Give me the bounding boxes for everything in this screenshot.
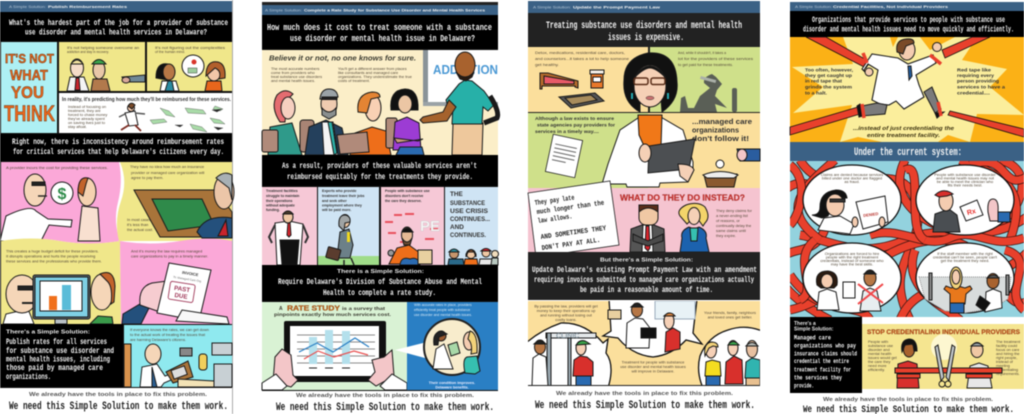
panel: it's not what you think: IT'S NOT — [5, 51, 54, 66]
panel: not the complexities — [147, 42, 232, 91]
panel: in reality: Instead of focusing on — [68, 104, 106, 109]
footer: We already have the tools in place to fix this problem. — [29, 392, 208, 398]
icon: clinic doors and two men: CLINIC — [556, 333, 579, 340]
panel: stop credentialing: facility could — [996, 343, 1017, 348]
panel: classroom scene — [262, 50, 498, 155]
panel: in reality: on saving lives just to — [68, 120, 105, 125]
panel: classroom scene: and mental health issues. — [271, 78, 315, 83]
panel: detox and medications: and counselors...it takes a lot to help someone — [535, 56, 629, 61]
panel: provider incurs cost — [0, 162, 232, 324]
panel: solution: those paid by managed care — [6, 364, 103, 373]
panel: what do they do instead: they expire. — [716, 233, 736, 238]
panel: treating issues: are harming Delaware's citizens. — [130, 337, 186, 342]
panel: past due: And it's money the law requires managed — [131, 248, 202, 254]
top title bar: Publish Reimbursement Rates — [48, 4, 128, 9]
panel: red tape starburst: credential.... — [957, 90, 990, 96]
panel: it's not what you think: THINK — [4, 101, 55, 126]
panel: benefits scene: use disorder and mental health issues — [620, 364, 686, 369]
note: they pay late — [528, 181, 619, 257]
icon: woman walking with briefcase — [326, 214, 354, 265]
whiteboard — [423, 50, 498, 106]
panel: in reality: stay afloat. — [68, 124, 87, 129]
panel: credential facilities — [777, 2, 1024, 414]
panel: managed care don't follow: ...managed care — [692, 119, 752, 126]
panel: red tape starburst: requiring every — [957, 73, 995, 78]
banner: solution: There is a Simple Solution: — [337, 269, 424, 275]
panel: what do they do instead: same claims until — [716, 228, 746, 233]
note: they pay late: They pay late — [534, 194, 575, 208]
panel: stop credentialing: substance use — [868, 343, 893, 348]
panel: classroom scene: treat substance use disorders — [271, 74, 322, 79]
footer — [803, 397, 1014, 414]
icon: flying money — [150, 106, 225, 132]
panel: treatment facilities: Treatment facilities — [266, 189, 298, 193]
panel: red tape starburst: they get caught up — [805, 73, 852, 78]
panel: people with disorders: the care they deserve. — [385, 199, 422, 203]
icon: doctor and patient in circle — [424, 319, 480, 375]
panel: solution: for substance use disorder and — [6, 347, 114, 356]
bubble: people with disorders: and mental health issues may not — [936, 176, 995, 180]
panel: past due — [120, 238, 232, 324]
panel: stop credentialing: People with — [868, 339, 888, 344]
top title bar — [0, 1, 232, 12]
icon: hand tossing paper in trash — [703, 149, 760, 187]
top title bar — [262, 2, 498, 15]
panel: providers get paid: And, while it shouldn't, it takes a — [678, 50, 727, 55]
bubble: staff member: credential can't be seen, people can't — [933, 254, 998, 260]
banner: inconsistency: for critical services that help Delaware's citizens every day. — [13, 147, 224, 157]
footer — [262, 391, 498, 414]
bubble: staff member: get the treatment they need. — [941, 258, 989, 263]
panel: crisis continues: USE CRISIS — [450, 208, 489, 215]
panel: crisis continues: SUBSTANCE — [450, 200, 486, 207]
panel: experts: employment where they — [322, 204, 362, 208]
banner: solution: Require Delaware's Division of Substance Abuse and Mental — [278, 277, 482, 287]
icon: invoice and hand: INVOICE — [182, 270, 199, 277]
panel: solution: insurance claims should — [794, 350, 857, 358]
bubble: people with disorders: People with substance use disorder — [934, 172, 996, 177]
top title bar: A Simple Solution: — [533, 6, 571, 10]
panel: solution: treatment facility for — [794, 366, 851, 374]
icon: running doctor — [119, 103, 145, 131]
panel: although a law exists: services in a timely way.... — [535, 129, 599, 134]
panel: detox and medications: Detox, medications, residential care, doctors, — [535, 50, 625, 55]
panel: providers get paid: lot for the providers of these services — [678, 56, 753, 61]
panel: people with disorders: disorders don't receive — [385, 194, 423, 198]
bubble: claims denied: billed under one doctor are flagged — [822, 176, 882, 180]
icon: doctor with denied paper: DENIED — [863, 211, 879, 218]
panel: red tape starburst: entire treatment facility. — [867, 133, 940, 139]
panel: red tape starburst: person providing — [957, 78, 999, 84]
panel: it's not what you think: WHAT — [10, 67, 48, 84]
bubble: organizations forced: people with the right treatment — [826, 254, 879, 260]
bubble: claims denied: as fraud. — [844, 179, 860, 184]
heading: hardest part — [0, 12, 232, 41]
bubble: staff member — [916, 243, 1014, 313]
icon: doctor with clipboard and patient — [608, 301, 695, 352]
footer: We already have the tools in place to fix this problem. — [556, 391, 734, 397]
footer: We need this Simple Solution to make them work. — [9, 401, 228, 413]
top title bar: Complete a Rate Study for Substance Use Disorder and Mental Health Services — [304, 8, 486, 12]
panel: red tape starburst — [790, 37, 1024, 142]
icon: friends and family — [705, 340, 760, 386]
panel: stop credentialing: the care they — [868, 359, 891, 364]
panel: benefits scene: money to keep their operations up — [537, 308, 595, 313]
panel: benefits scene: Your friends, family, neighbors — [704, 310, 756, 315]
panel: stop credentialing: need more — [868, 363, 887, 368]
panel: condition improves: Their condition improves. — [429, 381, 475, 385]
panel: classroom scene: Believe it or not, no one knows for sure. — [269, 54, 416, 62]
icon: chain-link fence and people — [919, 267, 1011, 313]
panel: treating issues: If everyone knows the rates, we can get down — [130, 327, 209, 332]
panel: crisis continues: AND — [450, 224, 464, 231]
banner: result: reimbursed equitably for the treatments they provide. — [287, 172, 473, 182]
panel: in reality: In reality, it's predicting how much they'll be reimbursed for these services. — [62, 97, 232, 103]
panel: rate study chart — [262, 302, 407, 390]
panel: condition improves — [395, 302, 498, 390]
panel: experts: and seek other — [322, 199, 347, 203]
footer: We already have the tools in place to fix this problem. — [296, 393, 475, 399]
panel: in reality: they've already spent — [68, 116, 106, 121]
panel: no idea how much: the actual cost. — [127, 227, 153, 232]
panel: no idea how much: They have no idea how much an insurance — [130, 164, 204, 169]
heading: under the current system: Under the current system: — [854, 147, 962, 159]
heading: treating is expensive: Treating substance use disorders and mental health — [546, 20, 742, 32]
top title bar: Update the Prompt Payment Law — [573, 4, 661, 10]
panel: treatment facilities: their operations — [266, 199, 293, 203]
panel: stop credentialing: right people, — [996, 355, 1017, 360]
panel: experts: Experts who provide — [322, 189, 356, 193]
panel: detox and medications — [528, 47, 648, 112]
banner: solution: Update Delaware's existing Prompt Payment Law with an amendment — [532, 266, 757, 275]
panel: solution: provide. — [794, 382, 814, 390]
icon: seated audience — [262, 89, 424, 155]
icon: desk and man in suit — [134, 173, 234, 238]
heading: how much does it cost: use disorder or mental health issue in Delaware? — [290, 34, 475, 44]
panel: no idea how much: agree to pay them. — [131, 175, 163, 180]
panel: providers get paid: to get paid for these treatments. — [678, 62, 733, 67]
panel: managed care don't follow: organizations — [692, 128, 739, 134]
icon: invoice and hand: To: Managed Care Org — [173, 275, 202, 283]
icon: speech tail — [395, 342, 427, 358]
bubble: organizations forced: credentials, instead of someone who — [820, 258, 884, 263]
icon: hands holding tablet — [262, 349, 407, 390]
panel: solution — [1, 324, 123, 387]
bubble: claims denied: Claims are denied because services — [821, 172, 883, 177]
doctor woman — [602, 53, 695, 187]
panel: benefits scene: By passing the law, providers will get — [534, 304, 599, 308]
panel: stop credentialing: credentialing — [996, 367, 1018, 372]
panel: solution: There's a Simple Solution: — [6, 330, 90, 336]
top title bar: Credential Facilities, Not Individual Providers — [833, 4, 949, 9]
panel: detox and medications: get healthy. — [535, 62, 559, 67]
banner: inconsistency: Right now, there is inconsistency around reimbursement rates — [12, 137, 224, 147]
panel: condition improves: use disorder and mental health issues. — [414, 313, 472, 317]
panel: stop credentialing: meeting — [996, 363, 1010, 368]
panel: red tape starburst: grinds the system — [805, 84, 852, 90]
panel: people with disorders: People with substance use — [385, 189, 430, 193]
panel: solution: the services they — [794, 374, 842, 382]
bubble: organizations forced — [803, 243, 901, 313]
heading: organizations — [790, 11, 1024, 37]
panel: although a law exists — [528, 113, 648, 188]
top title bar — [790, 2, 1024, 11]
panel: classroom scene: like consultants and managed care — [338, 70, 398, 75]
panel: what do they do instead: a never-ending list — [716, 213, 749, 218]
icon: two women with thought bubble — [156, 55, 225, 91]
icon: silhouette at computer — [680, 74, 737, 112]
note: they pay late: law allows. — [537, 213, 573, 226]
panel: condition improves: With accurate rates in place, providers — [414, 303, 472, 307]
panel: people with disorders — [381, 187, 444, 265]
footer: We need this Simple Solution to make them work. — [535, 400, 755, 412]
panel: red tape starburst: Too often, however, — [805, 68, 853, 72]
panel: budget deficit: these services and the professionals who provide them. — [6, 258, 102, 264]
note: they pay late: DON'T PAY AT ALL. — [541, 237, 601, 253]
panel: benefits scene: Treatment for people with substance — [622, 360, 684, 364]
heading: hardest part: What's the hardest part of the job for a provider of substance — [9, 18, 228, 28]
panel: not helping someone: addiction and stay in recovery. — [67, 49, 109, 54]
panel: red tape starburst: ...instead of just credentialing the — [853, 126, 954, 132]
banner: result — [262, 155, 498, 186]
panel: rate study — [262, 2, 498, 414]
panel: crisis continues: CONTINUES. — [450, 232, 486, 239]
icon: doctor, patient, dollar bubble: $ — [58, 186, 67, 203]
panel: what do they do instead — [528, 188, 760, 252]
banner: solution — [262, 265, 498, 301]
banner: solution: But there's a Simple Solution: — [600, 258, 693, 264]
panel: it's not what you think: YOU — [11, 83, 44, 102]
top title bar — [528, 1, 760, 13]
bubble: people with disorders: fits their needs best. — [948, 182, 982, 188]
panel: stop credentialing: instead of — [996, 359, 1014, 364]
icon: invoice and hand: DUE — [174, 292, 188, 301]
heading: how much does it cost — [262, 15, 498, 49]
panel: no idea how much: it's less than — [127, 222, 148, 227]
icon: bed, pills, tray — [540, 70, 604, 108]
panel: stop credentialing: efficiently. — [868, 367, 885, 372]
panel: condition improves: Delaware benefits. — [435, 386, 469, 390]
panel: treatment facilities: funding. — [266, 208, 280, 212]
panel: solution: credential the entire — [794, 358, 849, 365]
panel: not helping someone — [59, 42, 145, 91]
banner: solution — [528, 252, 760, 300]
panel: solution: organizations who pay — [794, 342, 856, 350]
panel: stop credentialing — [862, 324, 1024, 389]
panel: not the complexities: It's not figuring out the complexities — [155, 45, 225, 50]
icon: man, prescription, hand: Rx — [966, 208, 977, 217]
icon: man and woman, arms crossed — [630, 203, 709, 252]
panel: managed care don't follow: don't follow it! — [692, 136, 749, 143]
panel: classroom scene: You'll get a different answer from places — [338, 66, 407, 71]
chart: tablet with lines and bars — [284, 321, 386, 382]
banner: solution: Health to complete a rate study. — [323, 288, 436, 298]
panel: solution — [790, 317, 862, 393]
panel: treating issues: to the actual work of treating the issues that — [130, 332, 206, 337]
panel: it's not what you think — [1, 42, 57, 133]
icon: doctor at office — [124, 343, 232, 387]
icon: four faces — [448, 248, 498, 265]
panel: classroom scene: come from providers who — [271, 70, 315, 75]
panel: solution: Simple Solution: — [794, 326, 834, 332]
panel: budget deficit: This creates a huge budget deficit for these providers. — [6, 248, 99, 254]
panel: not helping someone: It's not helping someone overcome an — [67, 45, 139, 50]
heading: under the current system — [790, 142, 1024, 161]
banner: solution: requiring invoices submitted to managed care organizations actually — [534, 276, 754, 285]
panel: red tape starburst: to a halt. — [805, 90, 827, 96]
note: they pay late: AND SOMETIMES THEY — [540, 225, 607, 242]
panel: what do they do instead: continually delay the — [716, 223, 751, 228]
bubble: organizations forced: may have the best skills. — [831, 262, 873, 266]
panel: no idea how much: provider or managed care organization will — [131, 170, 204, 175]
panel: solution: There's a — [794, 321, 816, 327]
footer: We need this Simple Solution to make them work. — [276, 402, 494, 414]
panel: stop credentialing: and hiring the — [996, 351, 1020, 356]
footer: We already have the tools in place to fix this problem. — [823, 397, 994, 403]
panel: although a law exists: Although a law exists to ensure — [535, 116, 615, 121]
panel: crisis continues: THE — [450, 191, 464, 198]
icon: red tape strips — [790, 37, 1024, 137]
panel: benefits scene: costly loans. — [555, 317, 577, 322]
panel: rate study chart: is a survey that — [342, 306, 386, 311]
icon: two men and outstretched hand — [67, 59, 145, 91]
panel: providers get paid — [650, 47, 760, 112]
panel: budget deficit — [1, 238, 121, 324]
banner: inconsistency — [0, 134, 232, 161]
top title bar: A Simple Solution: — [265, 8, 302, 12]
panel: in reality: treatment, they are — [68, 108, 101, 113]
top title bar: A Simple Solution: — [795, 5, 832, 9]
panel: not the complexities: of the human mind. — [155, 49, 185, 54]
panel: past due: care organizations to pay in a timely manner. — [131, 254, 208, 258]
icon: presenter — [420, 52, 498, 155]
top title bar: A Simple Solution: — [9, 5, 46, 9]
panel: what do they do instead: WHAT DO THEY DO INSTEAD? — [620, 194, 745, 202]
heading: hardest part: use disorder and mental health services in Delaware? — [25, 28, 207, 38]
footer — [9, 392, 228, 413]
bubble: claims denied — [803, 165, 901, 235]
heading: how much does it cost: How much does it cost to treat someone with a substance — [267, 23, 492, 33]
panel: what do they do instead: They deny claims for — [716, 208, 753, 213]
panel: rate study chart: A — [279, 306, 283, 312]
icon: glow, scissors, tape — [895, 334, 1002, 388]
panel: crisis continues — [445, 187, 498, 265]
panel: treating issues — [124, 325, 232, 387]
panel: treatment facilities — [262, 187, 317, 265]
heading: treating is expensive: issues is expensive. — [608, 32, 684, 44]
bubble: organizations forced: Organizations are forced to hire — [825, 251, 879, 256]
panel: treatment facilities: without adequate — [265, 204, 295, 208]
bubble: people with disorders: be able to meet the clinician who — [937, 179, 993, 184]
panel: stop credentialing: STOP CREDENTIALING INDIVIDUAL PROVIDERS — [867, 329, 1021, 336]
panel: prompt payment law — [526, 1, 762, 412]
bubble: people with disorders — [916, 165, 1014, 235]
panel: in reality: forced to chase money — [68, 112, 107, 117]
panel: solution: mental health issues, including — [6, 356, 110, 364]
heading: treating is expensive — [528, 13, 760, 46]
panel: stop credentialing: issues would get — [868, 355, 898, 360]
panel: experts: treatment leave their jobs — [322, 194, 364, 198]
panel: experts: will be paid more. — [321, 208, 351, 212]
icon: two doctors and red X — [816, 270, 883, 311]
panel: solution: Publish rates for all services — [6, 338, 107, 347]
panel: benefits scene — [526, 299, 762, 388]
icon: doctor tangled in red tape — [857, 39, 944, 118]
panel: although a law exists: state agencies pay providers for — [537, 122, 615, 128]
panel: classroom scene: organizations. They underestimate the true — [338, 74, 412, 79]
whiteboard: ADDICTION — [433, 63, 498, 77]
panel: red tape starburst: services to have a — [957, 84, 1006, 90]
panel: benefits scene: and running without losing out — [540, 312, 593, 318]
icon: document — [545, 134, 583, 178]
panel: solution: Managed care — [794, 334, 831, 342]
panel: rate study chart: RATE STUDY — [287, 306, 340, 312]
panel: stop credentialing: disorder and — [868, 347, 890, 352]
icon: invoice and hand: PAST — [174, 285, 191, 294]
panel: classroom scene: costs of treatment. — [338, 78, 370, 83]
panel: stop credentialing: mental health — [868, 351, 891, 356]
panel: crisis continues: CONTINUES... — [450, 216, 490, 223]
panel: benefits scene: will improve in Delaware. — [631, 368, 675, 374]
icon: clinic doors and two men — [532, 333, 596, 386]
bubble: staff member: If the staff member with the right — [937, 251, 994, 256]
icon: invoice and hand — [122, 263, 229, 324]
panel: what do they do instead: of reasons, or — [716, 218, 740, 223]
icon: man with empty pockets — [269, 211, 308, 265]
panel: benefits scene: and loved ones get better. — [708, 314, 752, 320]
footer — [535, 391, 755, 412]
icon: bald man, monitor with bar chart, man — [3, 272, 115, 324]
note: they pay late: much longer than the — [536, 200, 605, 217]
panel: red tape tangle — [777, 160, 1024, 320]
panel: rate study chart: pinpoints exactly how much services cost. — [274, 312, 391, 317]
icon: doctor, patient, dollar bubble — [0, 174, 100, 241]
icon: brick wall and homeless man: PE — [420, 218, 440, 235]
panel: no idea how much: In most cases, — [127, 217, 152, 222]
panel: provider incurs cost: A provider incurs the cost for providing these services. — [6, 165, 108, 170]
panel: budget deficit: It disrupts operations and hurts the people receiving — [6, 254, 95, 258]
banner: solution: be paid in a reasonable amount of time. — [580, 286, 713, 295]
panel: experts — [318, 187, 379, 265]
banner: result: As a result, providers of these valuable services aren't — [282, 161, 477, 171]
panel: no idea how much — [117, 162, 234, 241]
panel: red tape starburst: Red tape like — [957, 68, 992, 72]
panel: stop credentialing: focus on care — [996, 347, 1019, 352]
panel: publish reimbursement rates — [0, 0, 234, 414]
panel: classroom scene: The most accurate numbers — [271, 66, 319, 71]
panel: red tape starburst: in red tape that — [805, 78, 843, 84]
panel: in reality — [59, 93, 232, 133]
panel: managed care don't follow — [648, 113, 760, 188]
panel: solution: organizations. — [6, 373, 51, 382]
panel: stop credentialing: The treatment — [996, 339, 1021, 344]
panel: condition improves: efficiently treat people with substance — [414, 308, 470, 312]
panel: treatment facilities: struggle to maintain — [266, 194, 299, 198]
panel: stop credentialing: requirements. — [996, 371, 1020, 376]
